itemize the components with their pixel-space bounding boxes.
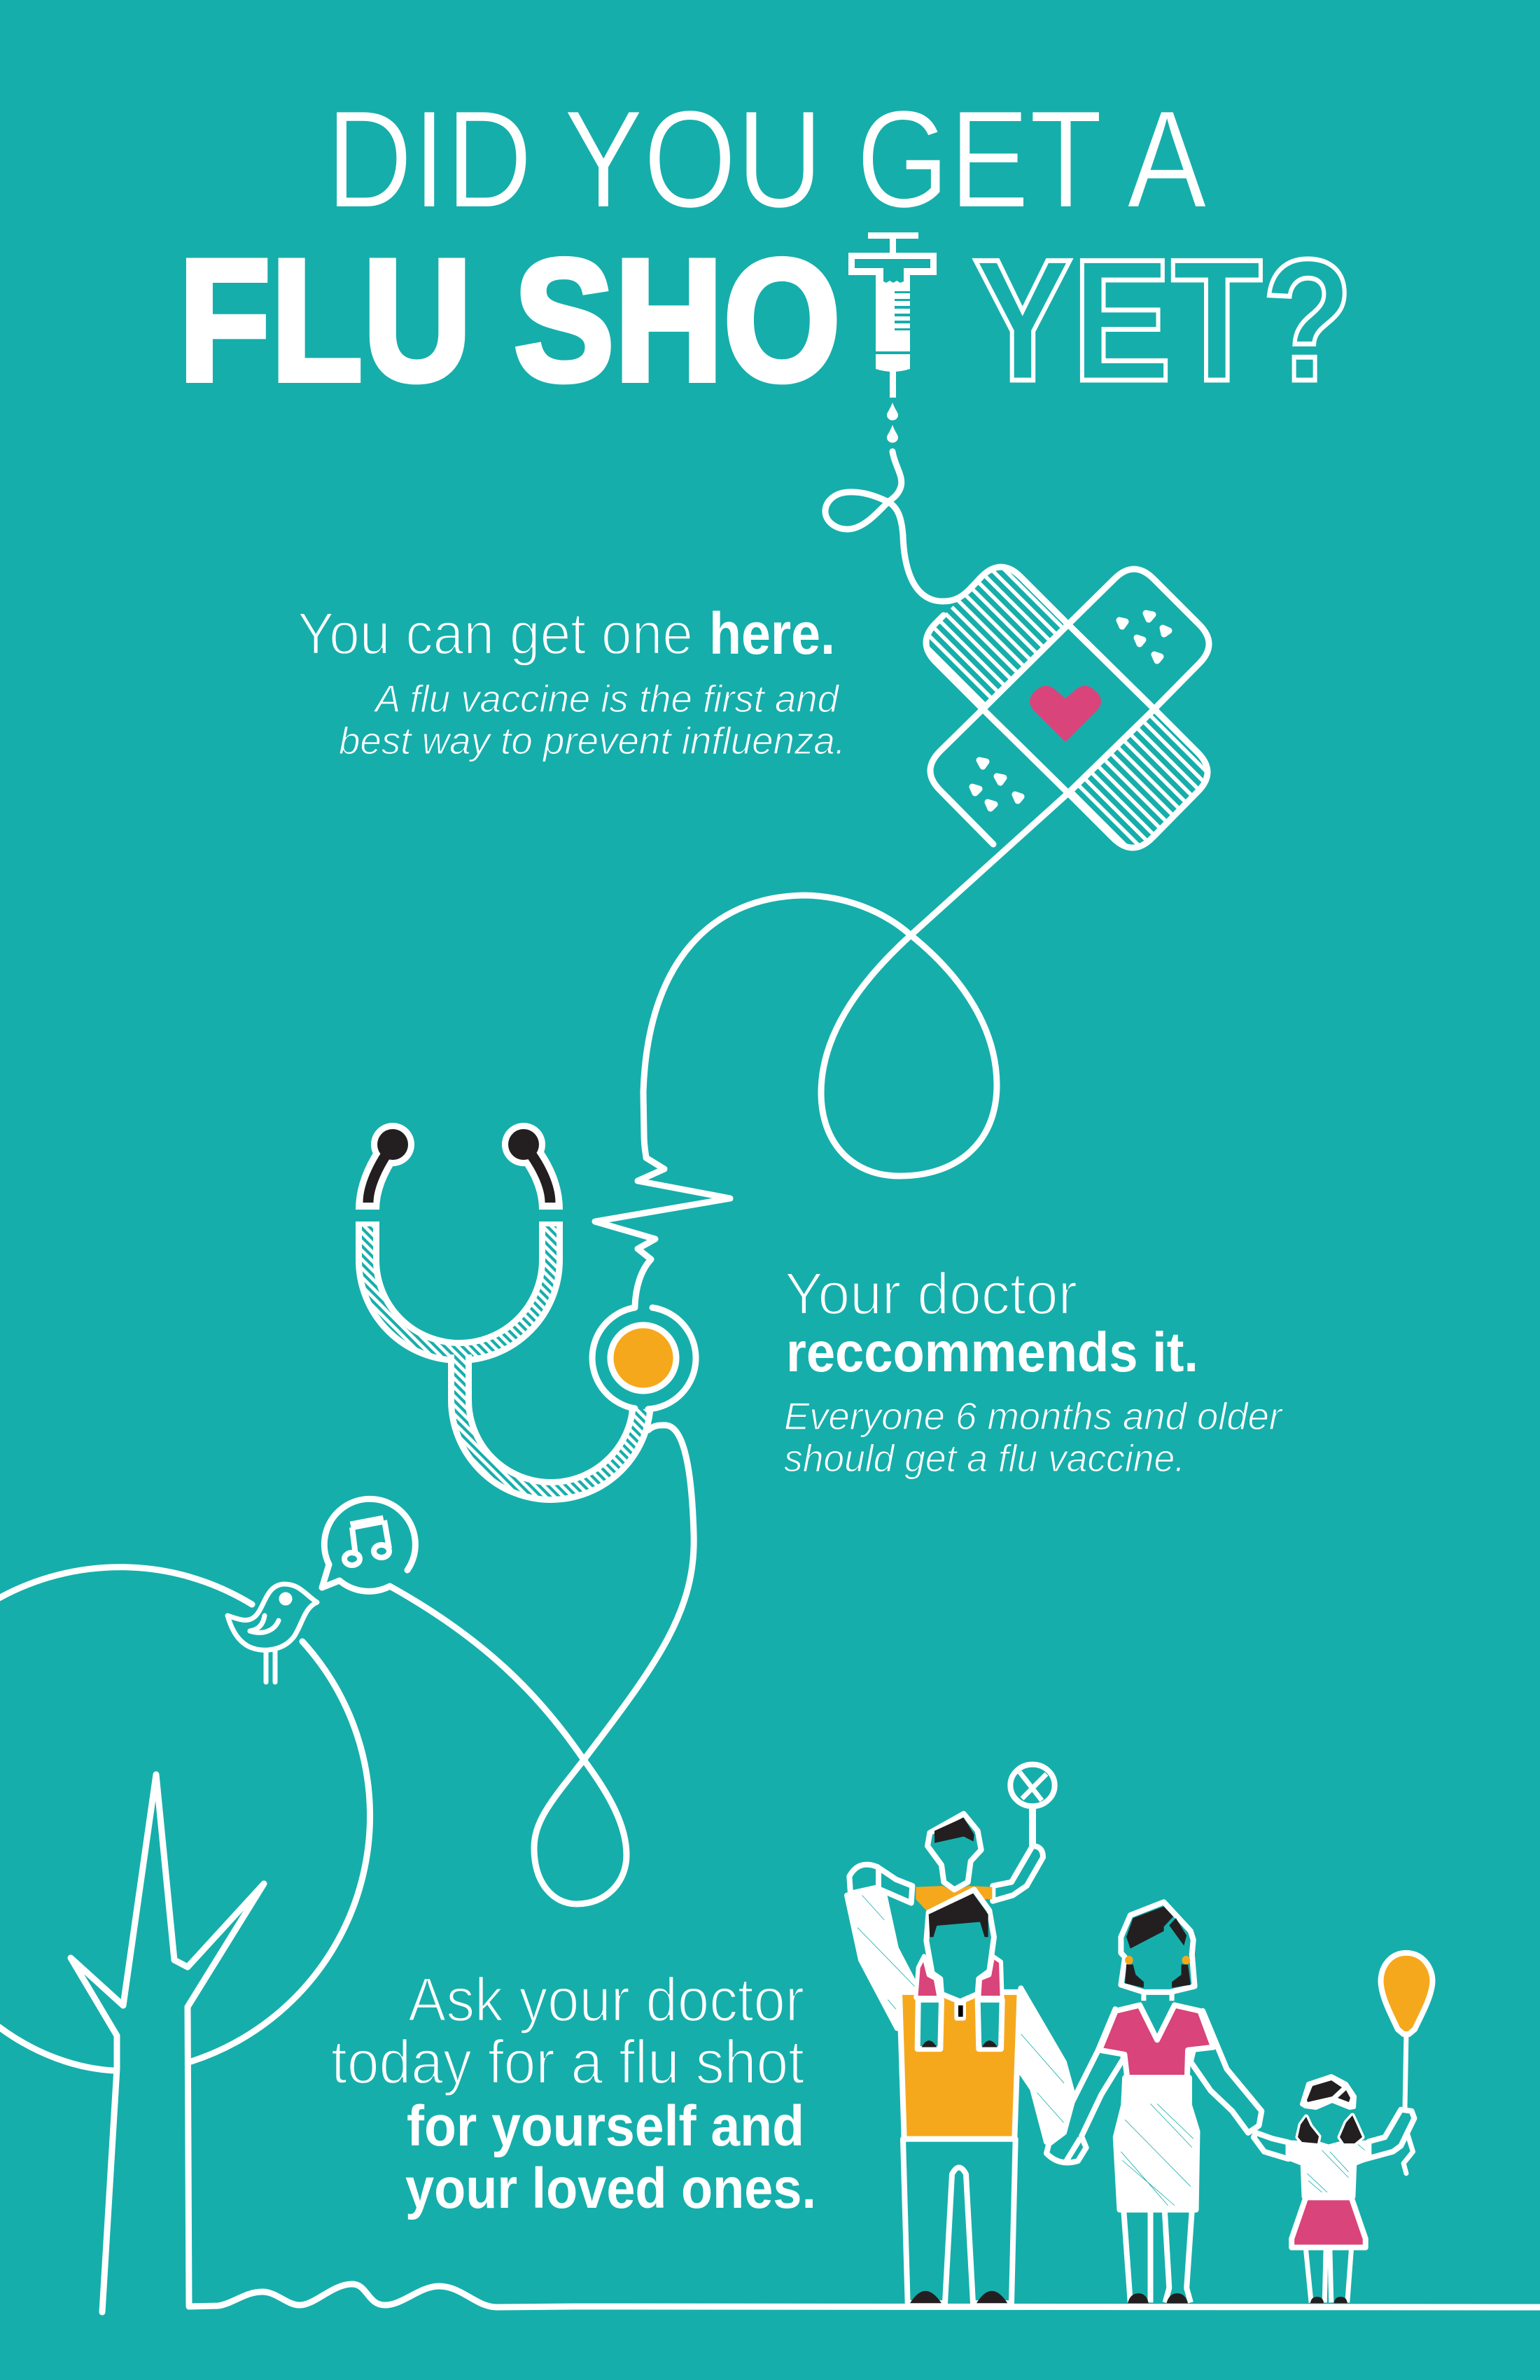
girl hair black <box>1307 2080 1350 2102</box>
sleeve hatch lines <box>858 1896 1064 2123</box>
stethoscope: right earpiece <box>526 1148 551 1210</box>
balloon <box>1381 1953 1432 2034</box>
tree trunk and ground line <box>71 1774 1540 2312</box>
girl shoes <box>1310 2297 1348 2303</box>
mum earrings <box>1125 1956 1133 1964</box>
girl hair cap <box>1302 2076 1354 2108</box>
son legs <box>918 2000 1002 2049</box>
girl legs <box>1306 2249 1351 2302</box>
girl right arm <box>1355 2110 1414 2162</box>
dad trousers <box>903 2139 1016 2303</box>
wire: bandage loop to ECG line <box>595 793 1068 1306</box>
family: mum and daughter <box>1100 1902 1432 2303</box>
text: your loved ones: your loved ones. <box>405 2157 816 2220</box>
title: yet outlined: YET? <box>973 223 1353 417</box>
bandage dots <box>972 613 1169 808</box>
text: everyone 6 months: Everyone 6 months and older <box>784 1394 1284 1438</box>
balloon string <box>1404 2034 1413 2174</box>
icon: syringe forming the letter T <box>848 232 937 442</box>
text: reccommends it: reccommends it. <box>786 1321 1198 1383</box>
mum right arm <box>1191 2011 1261 2133</box>
text: flu vaccine line two: best way to prevent influenza. <box>339 719 846 762</box>
mum blouse <box>1100 2005 1213 2078</box>
text: here: here. <box>709 601 835 666</box>
icon: heart <box>1030 686 1101 742</box>
skirt hatch lines <box>1121 2104 1194 2206</box>
text: should get a flu vaccine: should get a flu vaccine. <box>784 1436 1185 1480</box>
son hair <box>934 1818 974 1843</box>
mum skirt <box>1116 2078 1197 2210</box>
mum arm holding dad hand <box>1046 2009 1124 2162</box>
dad shoes <box>910 2291 1007 2303</box>
bandage arm: bottom right outline <box>1068 709 1208 848</box>
icon: music notes <box>344 1520 389 1565</box>
wire: stethoscope to speech bubble <box>322 1425 694 1904</box>
shirt hatch lines <box>1307 2144 1365 2192</box>
dad raised arm <box>847 1890 916 2028</box>
son shoes <box>922 2040 997 2047</box>
text: for yourself and: for yourself and <box>407 2094 804 2158</box>
dad lowered arm <box>1020 1988 1073 2144</box>
girl head and hair <box>1298 2076 1362 2143</box>
text: flu vaccine line one: A flu vaccine is the first and <box>373 677 840 720</box>
bandage arm: bottom right hatched <box>1068 709 1208 848</box>
mum head <box>1121 1902 1195 1992</box>
girl left arm <box>1254 2133 1289 2159</box>
title: did you get a: DID YOU GET A <box>326 82 1207 237</box>
icon: bird <box>227 1584 317 1682</box>
mum neck lines <box>1144 1991 1172 2001</box>
son left arm <box>849 1865 912 1903</box>
bandage arm: top left hatched <box>926 567 1068 709</box>
text: your doctor: Your doctor <box>785 1261 1077 1326</box>
son shirt <box>916 1886 992 1910</box>
stethoscope: chest piece <box>592 1307 694 1409</box>
mum shoes <box>1128 2293 1188 2303</box>
icon: crossed bandage with heart <box>926 567 1209 848</box>
bandage arm: top left outline <box>926 567 1068 709</box>
girl pigtails <box>1298 2115 1362 2143</box>
text: today for a flu shot: today for a flu shot <box>331 2027 804 2096</box>
bandage centre diamond <box>983 624 1154 793</box>
dad vest <box>899 1992 1020 2139</box>
dad hair <box>929 1893 988 1937</box>
son trousers <box>916 1956 1002 1998</box>
stethoscope: upper tube <box>368 1222 551 1352</box>
bandage arm: bottom left <box>930 709 993 844</box>
stethoscope: left earpiece <box>368 1148 391 1210</box>
stethoscope: lower tube <box>460 1354 642 1491</box>
family: dad and son <box>847 1765 1124 2303</box>
dad collar <box>954 2000 966 2021</box>
wire: from syringe to bandage <box>825 451 970 601</box>
son head <box>927 1814 981 1890</box>
son right arm and lollipop hand <box>993 1846 1043 1901</box>
dad head <box>926 1890 994 2001</box>
girl shirt <box>1289 2143 1368 2197</box>
mum legs <box>1124 2210 1192 2302</box>
mum hair <box>1125 1907 1191 1988</box>
bandage arm: top right <box>1068 569 1209 709</box>
lollipop <box>1029 1806 1036 1846</box>
title: flu sho: FLU SHO <box>178 223 841 417</box>
tree canopy circle <box>0 1567 370 2071</box>
text: you can get one: You can get one <box>298 601 693 666</box>
text: ask your doctor: Ask your doctor <box>408 1965 804 2034</box>
icon: stethoscope <box>368 1123 696 1491</box>
girl skirt <box>1292 2197 1366 2248</box>
